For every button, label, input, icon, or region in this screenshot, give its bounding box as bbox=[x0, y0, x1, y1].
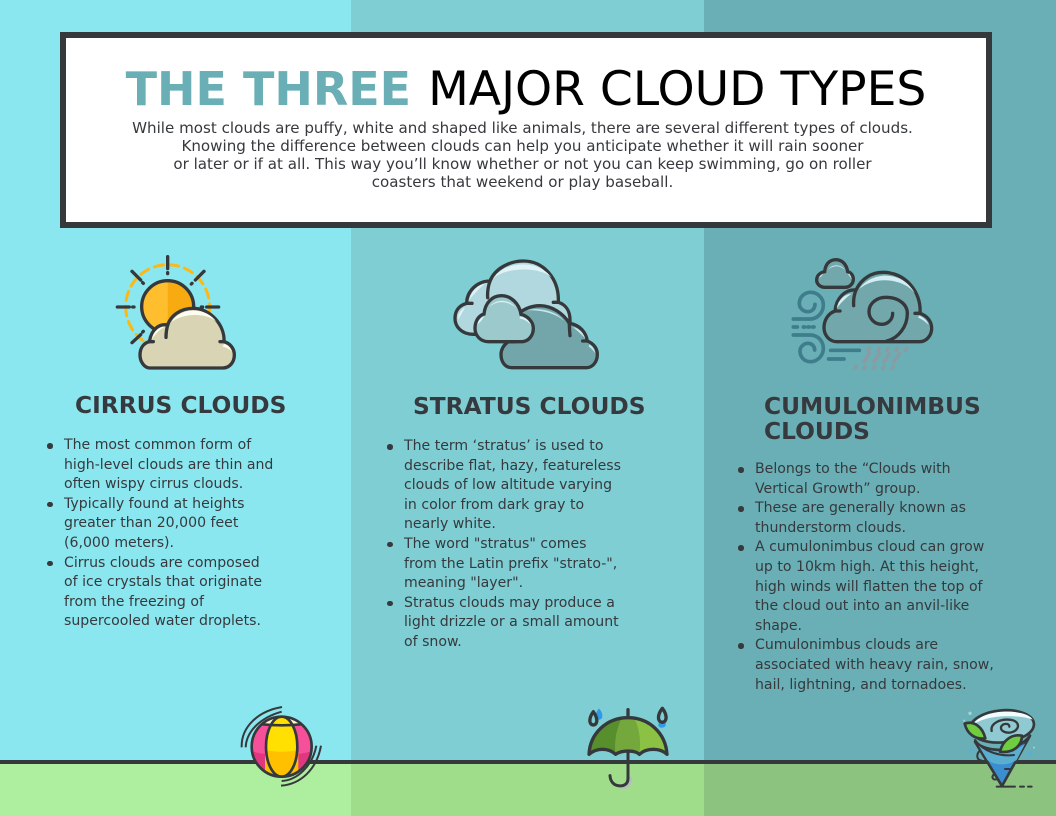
text: cirrus bullets: high-level clouds are thin and bbox=[64, 457, 273, 473]
text: cirrus bullets: greater than 20,000 feet bbox=[64, 515, 238, 531]
text: cirrus bullets bbox=[47, 437, 273, 629]
panel: cirrus background bbox=[0, 0, 351, 816]
icon: tornado bbox=[963, 708, 1036, 788]
intro text: While most clouds are puffy, white and shaped like animals, there are several different types of clouds. bbox=[132, 119, 913, 137]
heading: cirrus: CIRRUS CLOUDS bbox=[75, 392, 286, 419]
text: cumulonimbus bullets: Belongs to the “Clouds with bbox=[755, 461, 951, 477]
text: cirrus bullets: from the freezing of bbox=[64, 594, 204, 610]
icon: stratus clouds bbox=[453, 259, 599, 370]
text: cumulonimbus bullets: hail, lightning, and tornadoes. bbox=[755, 677, 967, 693]
text: cirrus bullets: of ice crystals that originate bbox=[64, 574, 262, 590]
text: cirrus bullets: often wispy cirrus clouds. bbox=[64, 476, 243, 492]
text: stratus bullets: Stratus clouds may produce a bbox=[404, 595, 615, 611]
text: cumulonimbus bullets: A cumulonimbus cloud can grow bbox=[755, 539, 984, 555]
intro text: or later or if at all. This way you’ll know whether or not you can keep swimming, go on roller bbox=[173, 155, 872, 173]
icon: beach ball bbox=[240, 706, 322, 787]
text: cumulonimbus bullets: the cloud out into an anvil-like bbox=[755, 598, 969, 614]
panel: stratus background bbox=[351, 0, 704, 816]
text: cirrus bullets: The most common form of bbox=[64, 437, 251, 453]
heading: stratus: STRATUS CLOUDS bbox=[413, 393, 645, 420]
text: stratus bullets: describe flat, hazy, featureless bbox=[404, 458, 621, 474]
text: cumulonimbus bullets: Cumulonimbus clouds are bbox=[755, 637, 938, 653]
panel: cumulonimbus background bbox=[704, 0, 1056, 816]
intro text: coasters that weekend or play baseball. bbox=[372, 173, 673, 191]
intro text bbox=[132, 119, 913, 191]
icon: sun and cloud bbox=[116, 255, 236, 370]
text: cumulonimbus bullets: shape. bbox=[755, 618, 802, 634]
text: stratus bullets: clouds of low altitude varying bbox=[404, 477, 612, 493]
intro text: Knowing the difference between clouds can help you anticipate whether it will rain sooner bbox=[181, 137, 864, 155]
ground: cirrus bbox=[0, 764, 351, 816]
text: stratus bullets: light drizzle or a small amount bbox=[404, 614, 619, 630]
ground: cumulonimbus bbox=[704, 764, 1056, 816]
text: cirrus bullets: (6,000 meters). bbox=[64, 535, 174, 551]
ground: stratus bbox=[351, 764, 704, 816]
icon: umbrella bbox=[587, 706, 669, 789]
text: cumulonimbus bullets: Vertical Growth” group. bbox=[755, 481, 920, 497]
text: stratus bullets bbox=[387, 438, 621, 650]
text: stratus bullets: The term ‘stratus’ is used to bbox=[404, 438, 603, 454]
text: stratus bullets: of snow. bbox=[404, 634, 462, 650]
text: cirrus bullets: supercooled water droplets. bbox=[64, 613, 261, 629]
text: cumulonimbus bullets: thunderstorm clouds. bbox=[755, 520, 906, 536]
title: THE THREE MAJOR CLOUD TYPES bbox=[126, 62, 926, 117]
text: cumulonimbus bullets: up to 10km high. At this height, bbox=[755, 559, 979, 575]
text: stratus bullets: in color from dark gray to bbox=[404, 497, 584, 513]
text: stratus bullets: The word "stratus" comes bbox=[404, 536, 586, 552]
text: cumulonimbus bullets: These are generally known as bbox=[755, 500, 966, 516]
heading: cumulonimbus: CUMULONIMBUS bbox=[764, 393, 981, 420]
text: stratus bullets: meaning "layer". bbox=[404, 575, 523, 591]
text: stratus bullets: from the Latin prefix "strato-", bbox=[404, 556, 617, 572]
text: cumulonimbus bullets: associated with heavy rain, snow, bbox=[755, 657, 994, 673]
text: cirrus bullets: Typically found at heights bbox=[64, 496, 244, 512]
text: stratus bullets: nearly white. bbox=[404, 516, 496, 532]
ground line bbox=[0, 760, 1056, 764]
text: cumulonimbus bullets bbox=[738, 461, 994, 693]
text: cumulonimbus bullets: high winds will flatten the top of bbox=[755, 579, 983, 595]
icon: storm cloud with wind and rain bbox=[792, 258, 934, 370]
title panel bbox=[60, 32, 992, 228]
heading: cumulonimbus bbox=[764, 393, 981, 445]
heading: cumulonimbus: CLOUDS bbox=[764, 418, 870, 445]
text: cirrus bullets: Cirrus clouds are composed bbox=[64, 555, 260, 571]
